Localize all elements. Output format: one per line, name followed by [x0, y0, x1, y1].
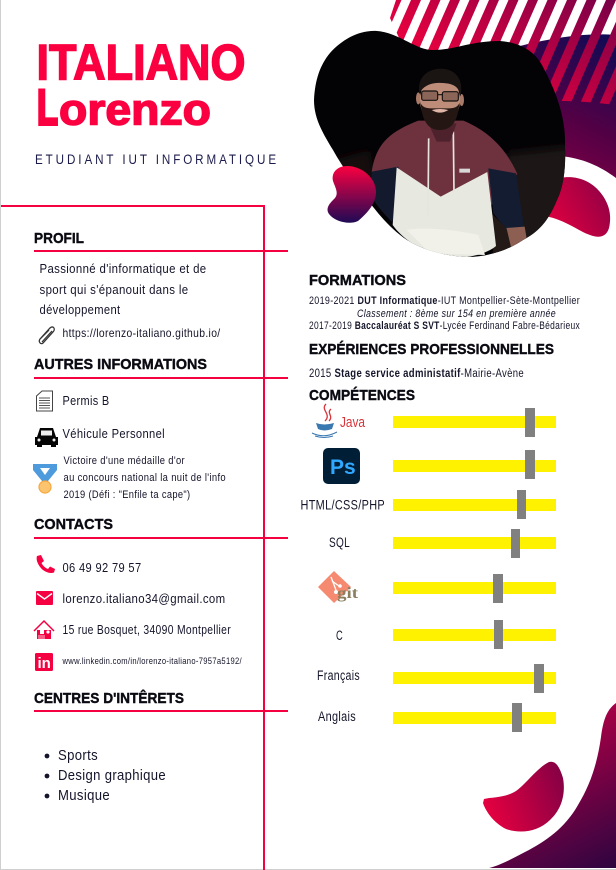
slider: anglais [393, 703, 556, 732]
email: lorenzo.italiano34@gmail.com [62, 591, 226, 606]
award text: 2019 (Défi : "Enfile ta cape") [64, 489, 190, 501]
icon: git [318, 571, 359, 603]
slider: c [393, 620, 556, 649]
slider: photoshop [393, 450, 556, 479]
permis: Permis B [62, 393, 110, 408]
panel: contacts [34, 516, 242, 672]
slider: java [393, 408, 556, 437]
website link: https://lorenzo-italiano.github.io/ [62, 326, 221, 340]
award text: Victoire d'une médaille d'or [64, 455, 185, 467]
heading: expériences: EXPÉRIENCES PROFESSIONNELLES [309, 341, 554, 358]
skill: français [317, 664, 556, 693]
address: 15 rue Bosquet, 34090 Montpellier [62, 622, 231, 637]
interests list [45, 747, 166, 804]
bottom right small blob [483, 762, 564, 832]
slider: git [393, 574, 556, 603]
background blob: crimson right [545, 177, 610, 237]
linkedin url: www.linkedin.com/in/lorenzo-italiano-7957a5192/ [62, 656, 242, 667]
title: name: ITALIANO [36, 34, 246, 90]
skill: anglais [318, 703, 556, 732]
icon: paperclip [39, 327, 54, 344]
skill: html: HTML/CSS/PHP [300, 498, 385, 512]
formation entries: 2017-2019 Baccalauréat S SVT-Lycée Ferdinand Fabre-Bédarieux [309, 320, 580, 332]
heading: autres informations: AUTRES INFORMATIONS [34, 356, 207, 373]
skill: git [318, 571, 556, 603]
formation entries: Classement : 8ème sur 154 en première année [357, 308, 556, 320]
formation entries [309, 295, 580, 332]
frame lines [1, 205, 288, 870]
skill: sql: SQL [329, 535, 350, 550]
skill: photoshop [323, 448, 556, 484]
award text: au concours national la nuit de l'info [64, 472, 226, 484]
icon: linkedin [35, 653, 53, 672]
vehicle: Véhicule Personnel [62, 426, 165, 441]
photo [314, 30, 566, 257]
profile text [40, 261, 206, 317]
experience entry: 2015 Stage service administatif-Mairie-Avène [309, 368, 524, 380]
phone number: 06 49 92 79 57 [62, 560, 142, 575]
icon: java: Java [340, 414, 366, 431]
icon: phone [37, 555, 55, 573]
skill: français: Français [317, 668, 360, 683]
slider: sql [393, 529, 556, 558]
icon: photoshop [323, 448, 360, 484]
profile text: sport qui s'épanouit dans le [40, 282, 188, 297]
profile text: Passionné d'informatique et de [40, 261, 206, 276]
striped band [390, 0, 616, 104]
icon: java [312, 404, 366, 438]
award text [64, 455, 226, 501]
background blob: dark upper right [520, 34, 616, 178]
skill: html [300, 490, 556, 519]
heading: contacts: CONTACTS [34, 516, 113, 533]
icon: document [36, 391, 52, 411]
bottom right large blob [489, 703, 616, 868]
skill: java [312, 404, 556, 438]
title: name: L [37, 80, 58, 136]
icon: house [34, 621, 54, 639]
interests list: Musique [58, 787, 110, 804]
icon: car [35, 428, 58, 447]
small gradient blob [328, 166, 376, 223]
skill: c: C [336, 628, 343, 643]
title: name: orenzo [59, 86, 211, 134]
panel: centres d'intérêts [34, 689, 184, 804]
heading: profil: PROFIL [34, 230, 84, 247]
skill: sql [329, 529, 556, 558]
skill: anglais: Anglais [318, 709, 356, 724]
icon: photoshop: Ps [330, 456, 356, 479]
panel: expériences [309, 341, 554, 380]
subtitle: ETUDIANT IUT INFORMATIQUE [35, 151, 279, 167]
skill: c [336, 620, 556, 649]
slider: html [393, 490, 556, 519]
panel: compétences [300, 387, 556, 732]
title: name [36, 34, 246, 136]
interests list: Sports [58, 747, 98, 764]
icon: mail [36, 591, 53, 605]
profile text: développement [40, 302, 120, 317]
heading: centres d'intérêts: CENTRES D'INTÊRETS [34, 689, 184, 707]
icon: medal [33, 464, 57, 493]
icon: git: git [337, 585, 359, 602]
heading: compétences: COMPÉTENCES [309, 387, 415, 404]
panel: formations [309, 272, 580, 332]
slider: français [393, 664, 556, 693]
formation entries: 2019-2021 DUT Informatique-IUT Montpellier-Sète-Montpellier [309, 295, 580, 307]
icon: linkedin: in [38, 655, 51, 672]
heading: formations: FORMATIONS [309, 272, 406, 289]
interests list: Design graphique [58, 767, 166, 784]
panel: profil [34, 230, 221, 344]
panel: autres informations [33, 356, 226, 501]
